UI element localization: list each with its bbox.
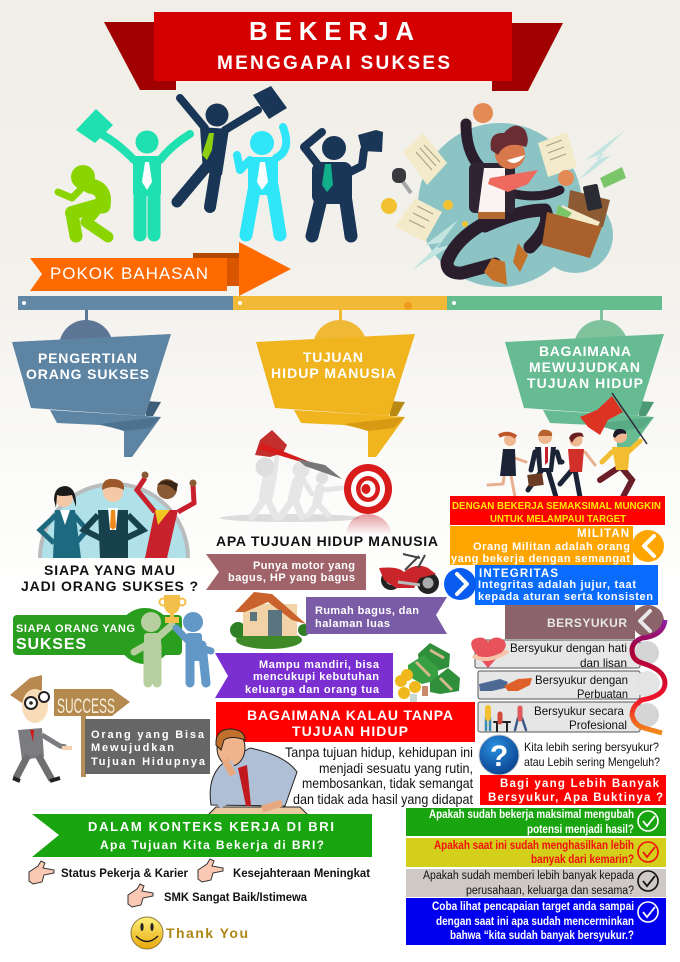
icon: navy jumping figure [177,86,287,207]
panel: militan: Orang Militan adalah orang [473,541,630,553]
icon: money stacks and coins [395,643,460,702]
panel: tujuan hidup manusia [256,310,415,457]
checklist: green item: potensi menjadi hasil? [527,824,634,836]
question: siapa yang mau: JADI ORANG SUKSES ? [21,578,198,594]
illustration: success signpost with cartoon man [10,675,130,781]
panel: bagaimana mewujudkan tujuan hidup: BAGAIMANA [539,343,631,359]
checklist: green item [406,808,666,836]
list: tujuan bekerja: Status Pekerja & Karier [61,866,188,880]
checklist: grey item: Apakah sudah memberi lebih banyak kepada [423,870,635,882]
panel: orang yang bisa mewujudkan: Mewujudkan [91,742,174,754]
ribbon: mampu mandiri: Mampu mandiri, bisa [259,659,380,671]
panel: bersyukur: dan lisan [580,656,627,670]
icon: smiley [131,917,163,949]
panel: dalam konteks kerja di bri: DALAM KONTEKS KERJA DI BRI [88,819,334,834]
checklist: grey item: perusahaan, keluarga dan sesama? [466,885,634,897]
panel: bagi yang lebih banyak bersyukur: Bersyukur, Apa Buktinya ? [488,792,663,804]
panel: siapa orang yang sukses: SUKSES [16,636,86,653]
text block: tanpa tujuan hidup: Tanpa tujuan hidup, kehidupan ini [285,744,473,760]
icon: heart with hands [471,638,508,668]
ribbon: punya motor [206,554,366,590]
icon: motorcycle [379,554,439,594]
checklist: yellow item [406,838,666,867]
text block: tanpa tujuan hidup: dan tidak ada hasil yang didapat [293,791,473,807]
icon: house [230,592,310,649]
ribbon: rumah bagus: Rumah bagus, dan [315,605,419,617]
woman left [53,510,81,558]
wave ribbon [632,620,665,733]
papers [395,132,577,242]
text block: kita lebih sering bersyukur: Kita lebih sering bersyukur? [524,740,659,754]
checklist: blue item: Coba lihat pencapaian target anda sampai [432,901,634,913]
panel: pengertian orang sukses: PENGERTIAN [38,350,137,366]
man center [98,510,128,558]
panel: militan: MILITAN [577,528,629,540]
illustration: three successful people [38,472,196,558]
text block: kita lebih sering bersyukur: atau Lebih sering Mengeluh? [524,755,660,769]
title banner: MENGGAPAI SUKSES [217,53,450,74]
panel: bagaimana mewujudkan tujuan hidup: TUJUAN HIDUP [527,375,643,391]
rows [475,640,640,732]
runner 3 [560,452,595,497]
ribbon: mampu mandiri: mencukupi kebutuhan [253,671,379,683]
text block: tanpa tujuan hidup: menjadi sesuatu yang rutin, [319,760,473,776]
panel: dengan bekerja semaksimal mungkin [450,496,665,525]
ribbon: rumah bagus [306,597,447,634]
pokok bahasan arrow [30,242,291,296]
panel: orang yang bisa mewujudkan [85,719,210,774]
panel: bagaimana kalau tanpa tujuan hidup [216,702,475,742]
list: tujuan bekerja: SMK Sangat Baik/Istimewa [164,890,307,904]
illustration: target and dart figures [220,430,392,535]
icon: crouching green figure [58,165,108,237]
panel: siapa orang yang sukses [13,595,211,683]
panel: integritas: INTEGRITAS [479,568,558,580]
title banner: BEKERJA [249,16,414,46]
panel: bersyukur: BERSYUKUR [547,616,627,630]
money [600,167,626,188]
panel: orang yang bisa mewujudkan: Orang yang Bisa [91,729,205,741]
panel: militan: yang bekerja dengan semangat [451,553,630,565]
timeline bar [18,296,662,310]
panel: siapa orang yang sukses: SIAPA ORANG YANG [16,623,135,635]
runner 4 [600,441,640,497]
icon: pointing hand [29,861,54,884]
icon: navy figure with folder [304,130,383,236]
panel: bagaimana kalau tanpa tujuan hidup: TUJUAN HIDUP [292,723,408,739]
ribbon: rumah bagus: halaman luas [315,618,390,630]
panel: bagaimana mewujudkan tujuan hidup: MEWUJUDKAN [529,359,640,375]
icon: cyan figure [237,127,286,235]
panel: bersyukur: Bersyukur secara [534,704,624,718]
ribbon: punya motor: bagus, HP yang bagus [228,572,355,584]
text block: tanpa tujuan hidup: membosankan, tidak semangat [302,775,473,791]
panel: bersyukur: Profesional [569,718,627,732]
ribbon: mampu mandiri: keluarga dan orang tua [245,684,380,696]
panel: militan [450,526,664,565]
title banner [104,12,563,91]
illustration: jumping businessman [381,103,626,287]
icon: teal figure with briefcase [76,109,190,235]
thank you: Thank You [166,925,248,941]
list: tujuan bekerja: Kesejahteraan Meningkat [233,866,370,880]
icon: question mark [479,735,519,775]
woman right [145,510,178,558]
heading: apa tujuan hidup manusia: APA TUJUAN HIDUP MANUSIA [216,533,438,549]
panel: bagi yang lebih banyak bersyukur: Bagi yang Lebih Banyak [500,778,660,790]
panel: bagi yang lebih banyak bersyukur [480,775,666,805]
panel: integritas: kepada aturan serta konsisten [478,591,653,603]
checklist: yellow item: banyak dari kemarin? [531,854,634,866]
panel: dalam konteks kerja di bri: Apa Tujuan Kita Bekerja di BRI? [100,838,324,852]
ribbon: punya motor: Punya motor yang [253,560,355,572]
text block: tanpa tujuan hidup [285,744,473,807]
illustration: success signpost with cartoon man: SUCCESS [57,695,115,718]
cartoon man [10,675,72,781]
checklist: blue item [406,898,666,945]
illustration: running team with flag [488,393,647,497]
checklist: grey item [406,869,666,897]
panel: tujuan hidup manusia: TUJUAN [303,349,363,365]
panel: bagaimana kalau tanpa tujuan hidup: BAGAIMANA KALAU TANPA [247,707,453,723]
checklist: yellow item: Apakah saat ini sudah menghasilkan lebih [434,840,634,852]
icon: pointing hand [128,884,153,907]
briefcase [566,190,610,227]
panel: tujuan hidup manusia: HIDUP MANUSIA [271,365,396,381]
panel: bersyukur: Bersyukur dengan hati [510,641,627,655]
list: tujuan bekerja [29,859,370,907]
checklist: blue item: dengan saat ini apa sudah mencerminkan [436,916,634,928]
figures with trophy [134,595,211,683]
icon: shaking hands [479,678,532,691]
icon: question mark: ? [490,740,508,773]
panel: bersyukur: Perbuatan [577,687,628,701]
panel: dalam konteks kerja di bri [32,814,372,857]
man [447,124,560,273]
checklist: green item: Apakah sudah bekerja maksimal mengubah [429,809,634,821]
illustration: bored man at desk [208,729,308,815]
icon: office team [486,708,526,731]
icon: pointing hand [198,859,223,882]
panel: integritas: Integritas adalah jujur, taat [478,579,636,591]
pokok bahasan arrow: POKOK BAHASAN [50,264,208,283]
flag [612,393,647,444]
runner 1 [488,458,526,497]
checklist: blue item: bahwa “kita sudah banyak bersyukur.? [450,930,634,942]
panel: orang yang bisa mewujudkan: Tujuan Hidupnya [91,756,206,768]
question: siapa yang mau [21,562,198,594]
panel: bagaimana mewujudkan tujuan hidup [505,310,664,457]
text block: kita lebih sering bersyukur [524,740,660,769]
panel: integritas [444,565,658,605]
panel: bersyukur [471,605,665,733]
panel: pengertian orang sukses: ORANG SUKSES [26,366,149,382]
panel: dengan bekerja semaksimal mungkin: DENGAN BEKERJA SEMAKSIMAL MUNGKIN [452,500,661,512]
key and coins [392,168,406,183]
question: siapa yang mau: SIAPA YANG MAU [44,562,175,578]
ribbon: mampu mandiri [215,653,393,698]
runner 2 [528,452,562,497]
panel: pengertian orang sukses [12,310,171,457]
panel: dengan bekerja semaksimal mungkin: UNTUK MELAMPAUI TARGET [490,513,627,525]
panel: bersyukur: Bersyukur dengan [535,673,628,687]
